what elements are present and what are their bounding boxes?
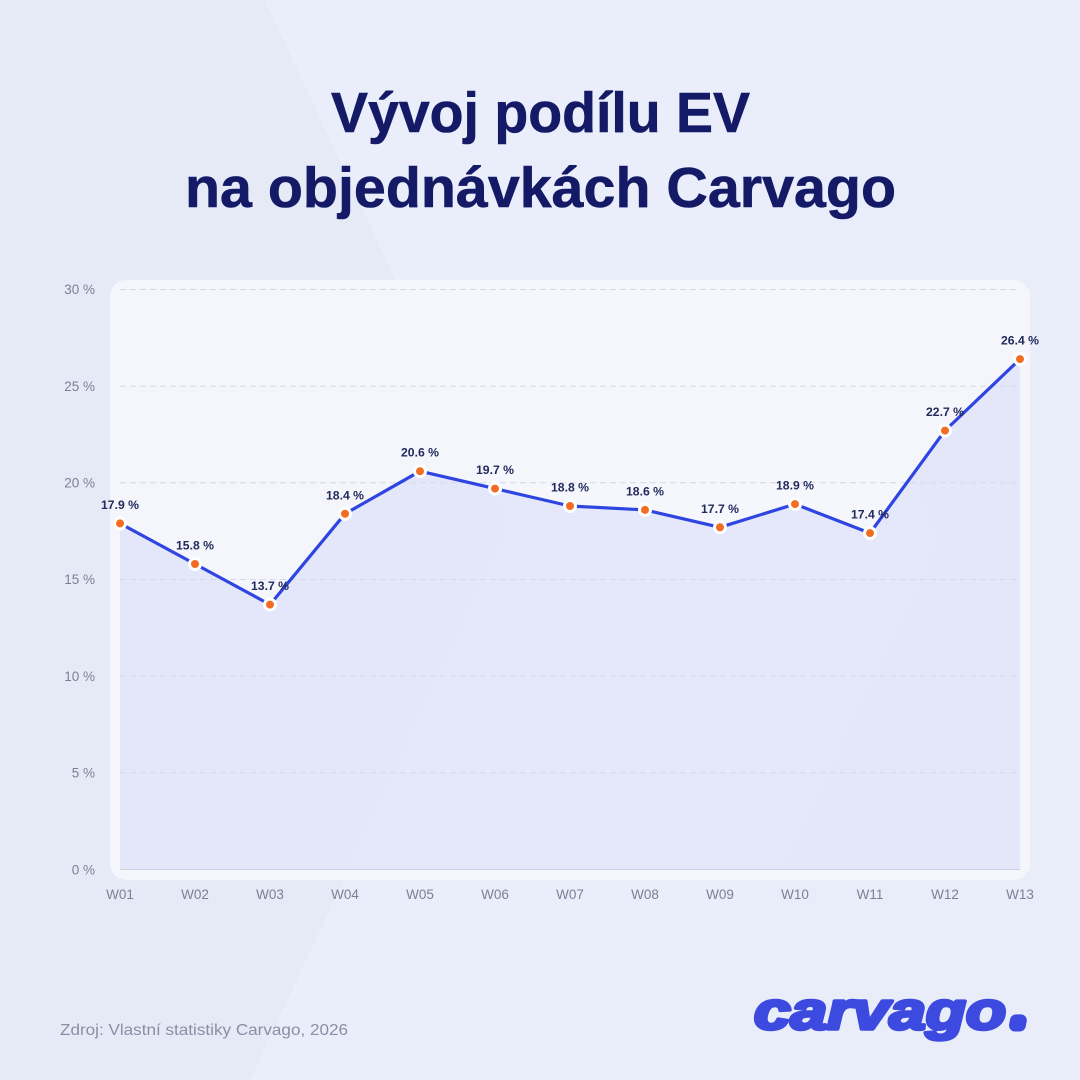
value labels bbox=[101, 334, 1039, 593]
value labels: 15.8 % bbox=[176, 538, 214, 552]
line chart bbox=[64, 282, 1039, 902]
x axis labels: W12 bbox=[931, 887, 959, 902]
x axis labels: W04 bbox=[331, 887, 359, 902]
title bbox=[185, 81, 896, 220]
value labels: 19.7 % bbox=[476, 463, 514, 477]
area under line bbox=[120, 359, 1020, 870]
value labels: 26.4 % bbox=[1001, 334, 1039, 348]
value labels: 17.7 % bbox=[701, 502, 739, 516]
y axis labels: 20 % bbox=[64, 476, 95, 490]
x axis labels bbox=[106, 887, 1034, 902]
y axis labels: 30 % bbox=[64, 282, 95, 297]
value labels: 22.7 % bbox=[926, 405, 964, 419]
y axis labels: 15 % bbox=[64, 572, 95, 587]
value labels: 17.9 % bbox=[101, 498, 139, 512]
title: na objednávkách Carvago bbox=[185, 156, 896, 220]
logo: carvago: carvago bbox=[754, 982, 1006, 1041]
data points bbox=[114, 354, 1026, 610]
y axis labels: 10 % bbox=[64, 669, 95, 684]
y axis labels bbox=[64, 282, 95, 878]
x axis labels: W06 bbox=[481, 887, 509, 902]
x axis labels: W01 bbox=[106, 887, 134, 902]
x axis labels: W08 bbox=[631, 887, 659, 902]
value labels: 18.9 % bbox=[776, 479, 814, 493]
x axis labels: W02 bbox=[181, 887, 209, 902]
value labels: 18.4 % bbox=[326, 488, 364, 502]
x axis labels: W05 bbox=[406, 887, 434, 902]
value labels: 13.7 % bbox=[251, 579, 289, 593]
value labels: 20.6 % bbox=[401, 446, 439, 460]
x axis labels: W11 bbox=[857, 887, 883, 902]
title: Vývoj podílu EV bbox=[331, 81, 750, 145]
x axis labels: W09 bbox=[706, 887, 734, 902]
gridlines bbox=[120, 290, 1020, 773]
x axis labels: W13 bbox=[1006, 887, 1034, 902]
panel: chart card bbox=[110, 280, 1030, 880]
y axis labels: 0 % bbox=[72, 862, 95, 878]
x axis baseline bbox=[120, 868, 1020, 870]
value labels: 18.6 % bbox=[626, 484, 664, 498]
data line bbox=[120, 359, 1020, 605]
value labels: 17.4 % bbox=[851, 508, 889, 522]
x axis labels: W07 bbox=[556, 887, 584, 902]
y axis labels: 25 % bbox=[64, 379, 95, 394]
y axis labels: 5 % bbox=[72, 766, 95, 780]
x axis labels: W03 bbox=[256, 887, 284, 902]
x axis labels: W10 bbox=[781, 887, 809, 902]
value labels: 18.8 % bbox=[551, 480, 589, 494]
logo: carvago: . bbox=[1014, 995, 1024, 1033]
source note: Zdroj: Vlastní statistiky Carvago, 2026 bbox=[60, 1022, 348, 1039]
